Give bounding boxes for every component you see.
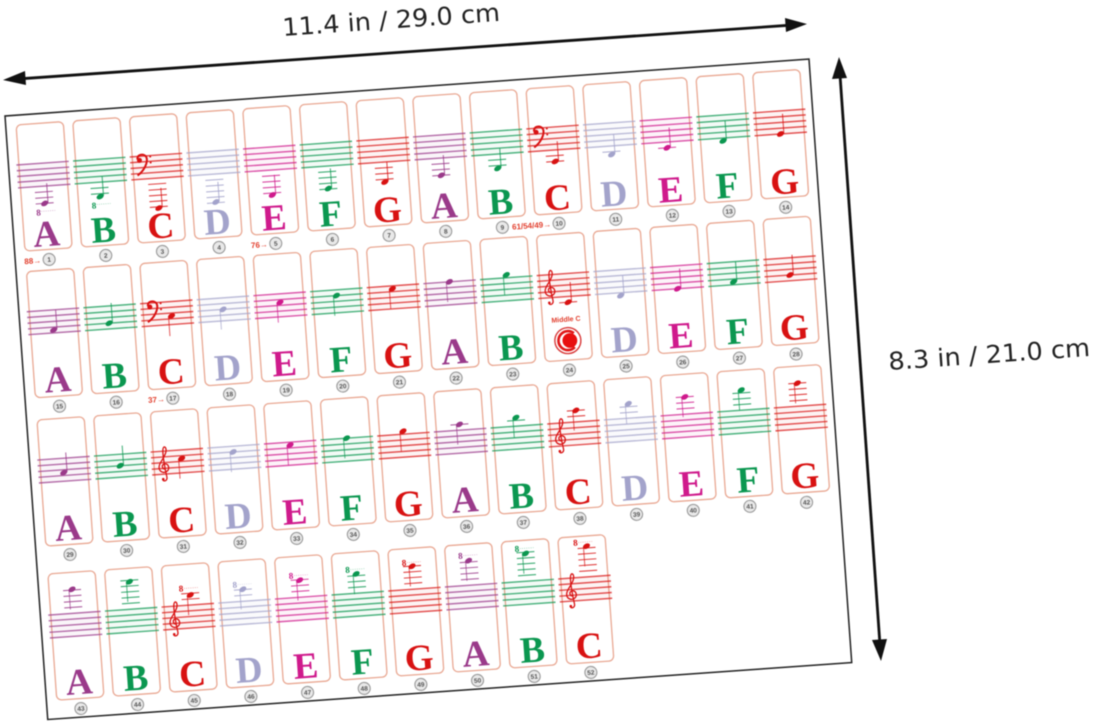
- key 51 B: B: [519, 629, 546, 672]
- key 39 D: D: [620, 467, 650, 510]
- key 7 G: [354, 97, 416, 243]
- key 27 F: 27: [736, 355, 744, 363]
- key 52 C: 8: [573, 537, 579, 548]
- key 29 A: [34, 416, 97, 562]
- dimension arrow: height: [832, 57, 887, 661]
- key 27 F: [704, 220, 766, 366]
- key 42 G: [771, 364, 833, 510]
- key 12 E: [637, 77, 699, 223]
- key 3 C: 3: [160, 249, 165, 256]
- key 49 G: 49: [417, 681, 425, 689]
- key 40 E: [658, 372, 720, 518]
- key 4 D: D: [203, 201, 232, 244]
- panel: row 1 keys 1-14: [14, 69, 813, 267]
- key 44 B: [102, 566, 164, 712]
- key 23 B: [477, 236, 540, 382]
- key 11 D: D: [599, 173, 629, 216]
- key 38 C: C: [563, 471, 593, 514]
- key 52 C: 52: [587, 669, 595, 677]
- key 20 F: 20: [339, 383, 347, 391]
- key 19 E: [251, 252, 313, 398]
- key 37 B: [488, 384, 550, 530]
- key 1 A: 1: [47, 257, 52, 264]
- key 2 B: B: [90, 209, 117, 252]
- key 21 G: [364, 244, 426, 390]
- key 41 F: F: [735, 459, 761, 502]
- key 9 B: 9: [500, 224, 505, 232]
- key 49 G: G: [403, 637, 435, 680]
- key 41 F: [714, 368, 777, 514]
- height label: 8.3 in / 21.0 cm: [887, 333, 1091, 376]
- key 44 B: B: [122, 657, 150, 700]
- key 5 E: 5: [274, 241, 278, 248]
- key 23 B: 23: [509, 371, 517, 379]
- key 30 B: [91, 412, 154, 558]
- key 15 A: A: [43, 359, 73, 402]
- key 24 middle C: [534, 232, 596, 378]
- key 22 A: [421, 240, 483, 386]
- key 29 A: A: [54, 507, 83, 550]
- key 34 F: 34: [350, 531, 358, 539]
- key 42 G: G: [789, 455, 821, 498]
- key 47 E: 47: [304, 689, 312, 697]
- key 45 C: C: [178, 653, 207, 696]
- key 44 B: 44: [134, 702, 142, 709]
- key 43 A: [45, 570, 108, 716]
- key 52 C: [555, 534, 618, 680]
- key 46 D: 8: [232, 580, 238, 590]
- key 8 A: A: [429, 185, 459, 228]
- key 35 G: 35: [406, 527, 414, 535]
- key 34 F: F: [339, 487, 364, 530]
- key 37 B: 37: [519, 519, 528, 527]
- key 5 E: E: [260, 197, 288, 240]
- key 2 B: 8: [91, 200, 97, 211]
- key 10 C: C: [543, 177, 572, 220]
- sticker sheet: [5, 59, 852, 719]
- key 19 E: E: [271, 343, 298, 386]
- key 18 D: 18: [226, 391, 234, 399]
- key 11 D: [580, 81, 643, 227]
- key 9 B: B: [487, 181, 515, 224]
- key 31 C: C: [167, 499, 196, 542]
- key 46 D: [215, 558, 278, 704]
- key 17 C: [137, 260, 200, 406]
- key 19 E: 19: [282, 387, 290, 395]
- key 22 A: 22: [452, 375, 460, 383]
- key 47 E: [272, 554, 334, 700]
- key 17 C: 17: [169, 395, 177, 403]
- key 38 C: [544, 380, 607, 526]
- key 45 C: [159, 562, 221, 708]
- key 27 F: F: [725, 311, 750, 353]
- key 38 C: 38: [576, 515, 584, 523]
- key 3 C: C: [146, 205, 176, 248]
- key 20 F: [307, 248, 370, 394]
- key 21 G: G: [382, 335, 414, 378]
- key 6 F: [297, 101, 359, 247]
- key 40 E: 40: [689, 507, 698, 515]
- key 4 D: 4: [217, 245, 222, 252]
- key 39 D: 39: [633, 511, 641, 519]
- key 50 A: A: [461, 633, 491, 676]
- key 6 F: 6: [330, 237, 335, 244]
- key 17 C: 37→: [148, 395, 165, 405]
- key 26 E: 26: [679, 359, 687, 367]
- key 46 D: 46: [247, 694, 255, 701]
- key 10 C: 61/54/49→: [512, 220, 551, 232]
- key 35 G: G: [392, 483, 424, 526]
- key 13 F: 13: [725, 208, 733, 216]
- key 50 A: 50: [474, 677, 482, 685]
- key 45 C: 45: [190, 698, 199, 705]
- key 22 A: A: [440, 331, 469, 374]
- key 50 A: [442, 542, 504, 688]
- key 24 middle C: 24: [566, 367, 574, 375]
- key 47 E: 8: [288, 571, 294, 581]
- key 28 G: 28: [792, 351, 800, 359]
- key 36 A: [431, 388, 493, 534]
- key 2 B: 2: [104, 253, 108, 260]
- key 8 A: [410, 93, 473, 239]
- key 51 B: [499, 538, 561, 684]
- key 23 B: B: [497, 327, 525, 369]
- key 48 F: [329, 550, 391, 696]
- panel: row 3 keys 29-42: [34, 364, 833, 562]
- key 48 F: 8: [345, 565, 351, 575]
- key 25 D: D: [610, 319, 639, 362]
- key 32 D: 32: [236, 539, 244, 547]
- key 33 E: [261, 400, 324, 546]
- key 6 F: F: [318, 193, 343, 236]
- key 8 A: 8: [444, 229, 448, 236]
- key 3 C: [127, 113, 189, 259]
- key 1 A: A: [32, 213, 62, 256]
- key 14 G: [750, 69, 813, 215]
- key 16 B: B: [101, 355, 128, 398]
- key 28 G: [761, 216, 823, 362]
- key 18 D: [194, 256, 256, 402]
- key 25 D: [591, 228, 653, 374]
- key 45 C: 8: [178, 583, 184, 594]
- key 24 middle C: Middle C: [551, 316, 581, 325]
- key 47 E: E: [292, 645, 320, 688]
- key 16 B: [81, 264, 143, 410]
- key 25 D: 25: [622, 363, 630, 371]
- key 48 F: F: [350, 641, 375, 684]
- icon: middle C swirl: [554, 327, 582, 354]
- key 20 F: F: [328, 339, 354, 381]
- key 43 A: 43: [77, 706, 85, 713]
- key 50 A: 8: [458, 551, 464, 561]
- key 43 A: A: [64, 661, 94, 704]
- key 32 D: D: [223, 495, 253, 538]
- key 30 B: B: [111, 503, 139, 546]
- key 49 G: [385, 546, 448, 692]
- key 13 F: [693, 73, 756, 219]
- key 31 C: [148, 408, 210, 554]
- key 15 A: 15: [56, 403, 64, 411]
- key 1 A: 88→: [24, 256, 42, 266]
- key 10 C: 10: [555, 220, 563, 228]
- key 2 B: [70, 117, 133, 263]
- key 52 C: C: [574, 625, 604, 668]
- key 40 E: E: [678, 463, 705, 506]
- key 21 G: 21: [396, 379, 404, 387]
- key 51 B: 8: [514, 544, 520, 554]
- key 15 A: [24, 268, 86, 414]
- key 46 D: D: [234, 649, 264, 692]
- key 1 A: [14, 121, 76, 267]
- key 17 C: C: [156, 351, 186, 394]
- key 5 E: 76→: [251, 240, 268, 250]
- key 42 G: 42: [803, 499, 811, 507]
- key 16 B: 16: [112, 399, 120, 407]
- key 48 F: 48: [360, 685, 369, 693]
- key 12 E: E: [657, 169, 684, 212]
- key 41 F: 41: [746, 503, 754, 511]
- key 4 D: [184, 109, 246, 255]
- key 33 E: E: [281, 491, 309, 534]
- key 32 D: [204, 404, 267, 550]
- key 11 D: 11: [612, 216, 620, 224]
- key 31 C: 31: [180, 544, 188, 551]
- key 36 A: 36: [463, 523, 471, 531]
- key 36 A: A: [450, 479, 480, 522]
- key 39 D: [601, 376, 663, 522]
- key 30 B: 30: [123, 548, 131, 555]
- key 34 F: [318, 396, 380, 542]
- key 18 D: D: [213, 347, 243, 390]
- key 14 G: G: [769, 161, 800, 204]
- key 51 B: 51: [530, 673, 538, 681]
- key 5 E: [240, 105, 303, 251]
- panel: row 2 keys 15-28: [24, 216, 823, 414]
- panel: row 4 keys 43-52: [45, 534, 618, 716]
- key 1 A: 8: [36, 207, 42, 218]
- key 33 E: 33: [293, 535, 301, 543]
- key 7 G: 7: [387, 233, 392, 240]
- key 28 G: G: [779, 307, 810, 350]
- key 37 B: B: [508, 475, 535, 518]
- key 13 F: F: [715, 165, 740, 208]
- dimension arrow: width: [3, 18, 807, 85]
- key 7 G: G: [372, 189, 403, 232]
- key 49 G: 8: [401, 558, 407, 568]
- key 26 E: E: [667, 315, 695, 357]
- key 29 A: 29: [66, 552, 74, 559]
- key 9 B: [467, 89, 529, 235]
- key 35 G: [374, 392, 437, 538]
- key 12 E: 12: [669, 212, 677, 220]
- key 26 E: [647, 224, 710, 370]
- key 10 C: [502, 85, 586, 233]
- key 14 G: 14: [782, 204, 790, 212]
